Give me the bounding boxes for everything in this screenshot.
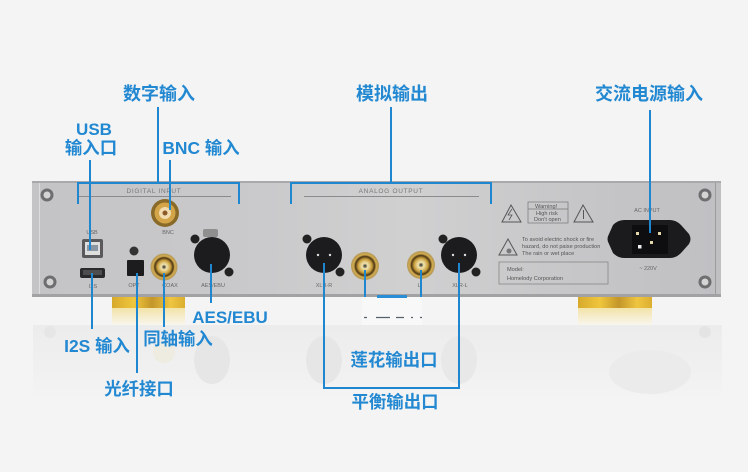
gold feet (112, 297, 652, 325)
RCA outputs: L (417, 283, 421, 289)
optical port: OPT (128, 283, 140, 289)
label: coaxial input: 同轴输入 (143, 329, 213, 349)
warning labels: To avoid electric shock or fire (522, 237, 594, 243)
XLR right output (302, 234, 344, 289)
USB port: USB (86, 230, 98, 236)
I2S port: I2S (89, 284, 97, 290)
analog output header: ANALOG OUTPUT (359, 188, 423, 195)
label: I2S input: I2S 输入 (64, 336, 130, 356)
coaxial connector (150, 254, 178, 289)
callout line: coaxial (163, 273, 165, 327)
warning labels: Warning! (535, 204, 558, 210)
optical port (127, 246, 144, 289)
warning labels: The rain or wet place (522, 251, 574, 257)
AES/EBU connector: AES/EBU (201, 283, 225, 289)
RCA outputs (351, 251, 435, 289)
AES/EBU connector (190, 229, 234, 289)
label: RCA output: 莲花输出口 (351, 350, 437, 370)
panel reflection (33, 325, 722, 400)
label: digital input: 数字输入 (123, 83, 195, 104)
AC power inlet (608, 208, 690, 272)
digital input header: DIGITAL INPUT (127, 188, 181, 195)
callout line: BNC (169, 160, 171, 210)
label: optical port: 光纤接口 (104, 379, 174, 399)
label: BNC input: BNC 输入 (162, 138, 240, 158)
callout line: I2S (91, 273, 93, 329)
callout lines: digital input bracket (78, 107, 239, 204)
callout line: AC power (649, 110, 651, 233)
USB port (82, 230, 103, 258)
label: balanced output: 平衡输出口 (352, 392, 438, 412)
screws (40, 188, 712, 288)
label: USB input: USB (76, 120, 112, 139)
warning labels: Don't open (534, 217, 561, 223)
white patch covering cropped label (362, 295, 422, 325)
BNC connector (151, 199, 179, 236)
label: USB input: 输入口 (65, 138, 117, 158)
I2S port (80, 268, 105, 290)
callout lines: analog output bracket (291, 107, 491, 204)
callout line: optical (136, 273, 138, 373)
warning labels: Homelody Corporation (507, 276, 563, 282)
callout box: balanced outputs (324, 263, 459, 388)
warning labels: Model: (507, 267, 524, 273)
XLR left output: XLR-L (452, 283, 468, 289)
XLR right output: XLR-R (316, 283, 332, 289)
AC power inlet: AC INPUT (634, 208, 660, 214)
BNC connector: BNC (162, 230, 174, 236)
label: AC power input: 交流电源输入 (595, 83, 703, 104)
label: analog output: 模拟输出 (356, 83, 428, 104)
warning labels: hazard, do not paise production (522, 244, 600, 250)
warning labels (499, 202, 608, 284)
label: AES/EBU: AES/EBU (192, 308, 268, 327)
callout lines: RCA outputs (365, 270, 421, 297)
XLR left output (438, 234, 480, 289)
AC power inlet: ~ 220V (639, 266, 657, 272)
label: USB input (65, 120, 117, 158)
coaxial connector: COAX (162, 283, 178, 289)
callout line: USB (89, 160, 91, 250)
warning labels: High risk (536, 211, 558, 217)
callout line: AES/EBU (210, 264, 212, 303)
device rear panel (32, 181, 721, 297)
